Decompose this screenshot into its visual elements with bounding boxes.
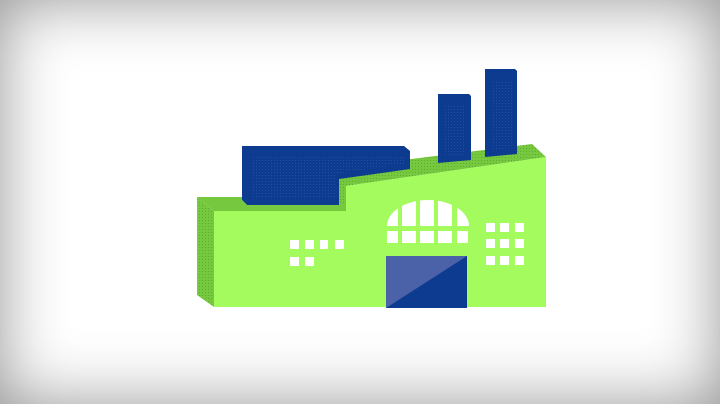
arched window: bottom panes <box>387 231 468 243</box>
front wall <box>214 157 546 307</box>
chimney halftone: tall <box>491 80 512 150</box>
rear roof block <box>242 146 410 205</box>
door <box>386 256 467 308</box>
factory building <box>197 69 546 308</box>
rear roof block halftone <box>252 156 404 198</box>
roof top surface: lower <box>197 197 346 211</box>
windows: left group <box>290 240 344 266</box>
chimney: short <box>438 94 471 163</box>
windows: right grid <box>486 223 524 265</box>
arched window: top panes <box>387 200 469 226</box>
chimney halftone: short <box>444 104 466 157</box>
chimney: tall <box>485 69 517 157</box>
roof top surface: sloped <box>339 144 546 204</box>
left side wall <box>197 197 214 307</box>
